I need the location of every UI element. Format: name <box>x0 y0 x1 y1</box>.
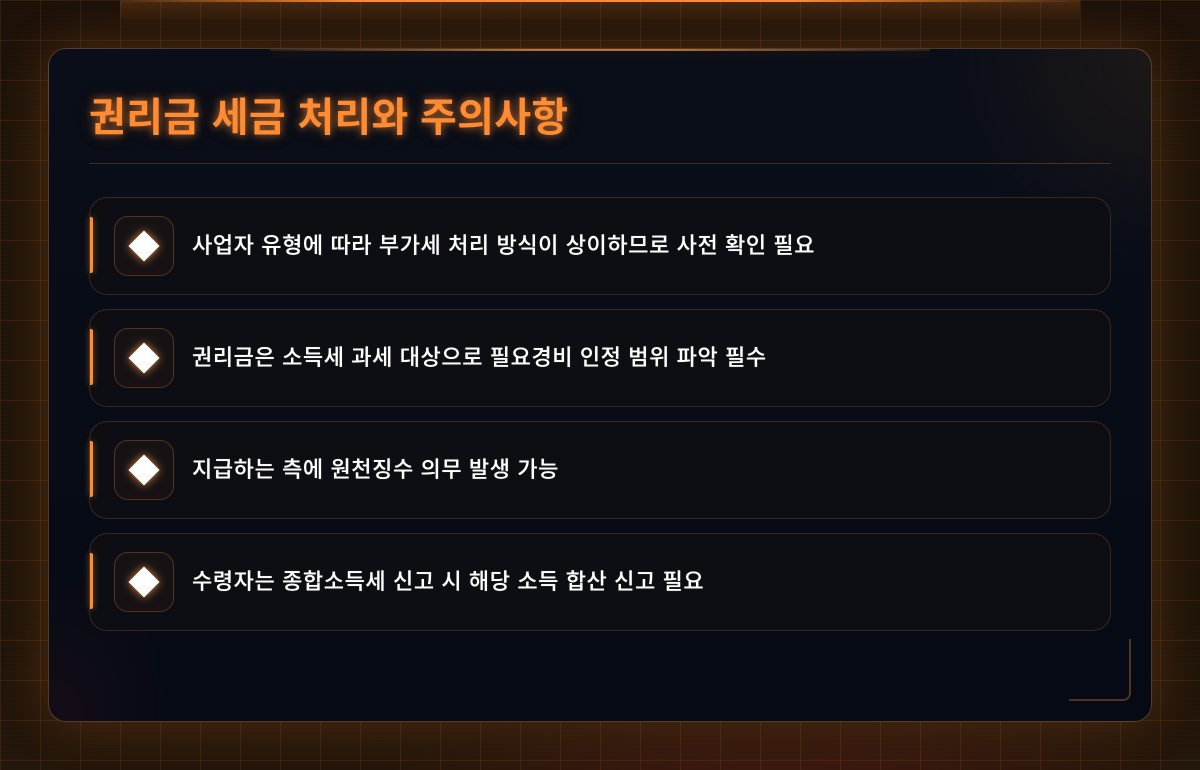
accent bar 3 <box>90 441 93 497</box>
title: 권리금 세금 처리와 주의사항 <box>89 96 568 140</box>
icon: diamond 3 <box>114 440 174 500</box>
icon: diamond 4 <box>114 552 174 612</box>
list item 1 <box>89 197 1111 295</box>
list item 2 <box>89 309 1111 407</box>
item text 1: 사업자 유형에 따라 부가세 처리 방식이 상이하므로 사전 확인 필요 <box>192 233 815 258</box>
top glow <box>120 0 1080 30</box>
item text 4: 수령자는 종합소득세 신고 시 해당 소득 합산 신고 필요 <box>192 569 704 594</box>
top glow bar <box>120 0 1080 2</box>
accent bar 1 <box>90 217 93 273</box>
corner bracket <box>1069 639 1131 701</box>
accent bar 2 <box>90 329 93 385</box>
card top accent bar <box>270 49 930 51</box>
list item 4 <box>89 533 1111 631</box>
icon: diamond 2 <box>114 328 174 388</box>
item text 2: 권리금은 소득세 과세 대상으로 필요경비 인정 범위 파악 필수 <box>192 345 767 370</box>
item text 3: 지급하는 측에 원천징수 의무 발생 가능 <box>192 457 559 482</box>
icon: diamond 1 <box>114 216 174 276</box>
accent bar 4 <box>90 553 93 609</box>
list item 3 <box>89 421 1111 519</box>
